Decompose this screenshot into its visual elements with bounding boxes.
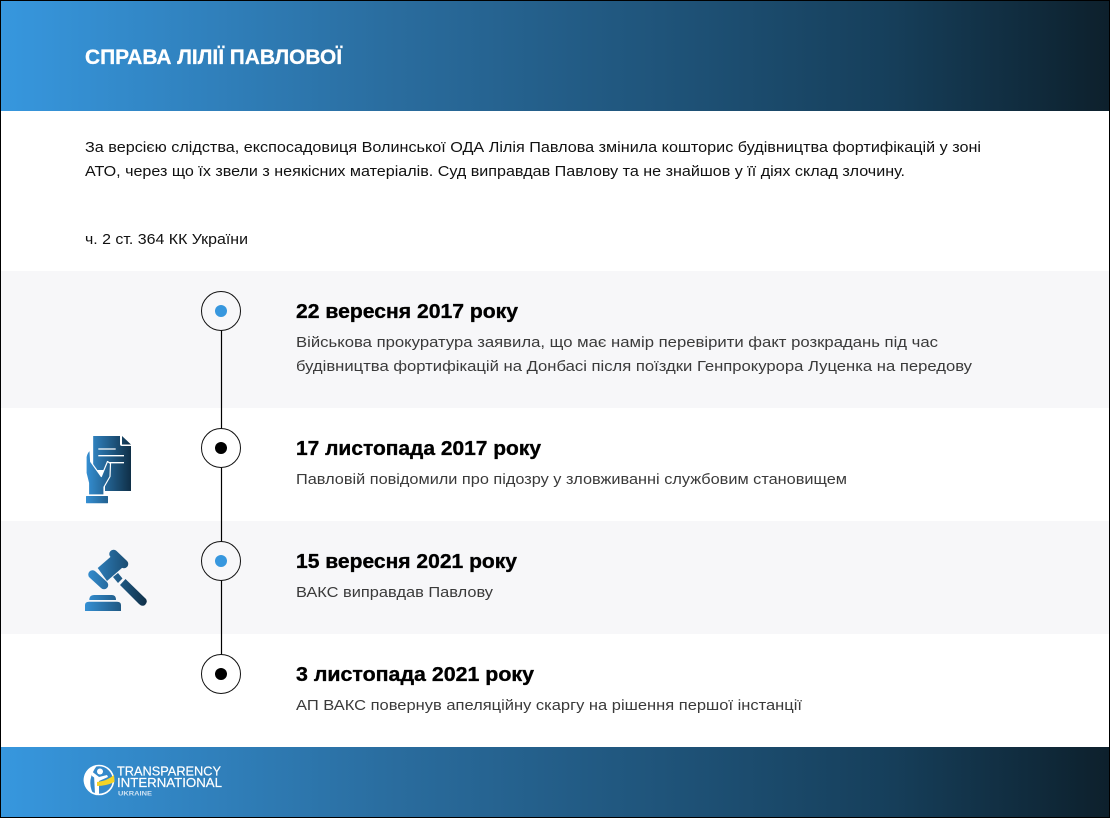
footer band bbox=[1, 747, 1109, 817]
timeline node 2 bbox=[202, 428, 240, 468]
intro text bbox=[85, 139, 981, 180]
logo: Transparency International Ukraine: INTERNATIONAL bbox=[117, 775, 222, 790]
timeline node 1 bbox=[202, 292, 240, 330]
logo emblem bbox=[84, 766, 114, 794]
timeline node 4 bbox=[202, 654, 240, 694]
event 2 bbox=[296, 438, 847, 488]
event 3 bbox=[296, 551, 518, 601]
event 1: 22 вересня 2017 року bbox=[296, 301, 519, 323]
legal article reference: ч. 2 ст. 364 КК України bbox=[85, 231, 248, 248]
intro text: АТО, через що їх звели з неякісних матеріалів. Суд виправдав Павлову та не знайшов у її діях склад злочину. bbox=[85, 163, 905, 180]
timeline line bbox=[220, 311, 222, 674]
logo: Transparency International Ukraine bbox=[84, 764, 222, 798]
title: СПРАВА ЛІЛІЇ ПАВЛОВОЇ bbox=[85, 46, 343, 69]
intro text: За версією слідства, експосадовиця Волинської ОДА Лілія Павлова змінила кошторис будівництва фортифікацій у зоні bbox=[85, 139, 981, 156]
event 1 bbox=[296, 301, 973, 375]
event 4 bbox=[296, 664, 803, 714]
row band: 15 September 2021 bbox=[1, 521, 1109, 634]
row band: 22 September 2017 bbox=[1, 271, 1109, 408]
icon: gavel bbox=[85, 554, 147, 611]
logo: Transparency International Ukraine: TRANSPARENCY bbox=[117, 764, 221, 778]
icon: hand holding document bbox=[86, 436, 131, 503]
timeline node 3 bbox=[202, 542, 240, 580]
event 1: Військова прокуратура заявила, що має намір перевірити факт розкрадань під час bbox=[296, 334, 939, 351]
logo: Transparency International Ukraine: UKRAINE bbox=[118, 790, 153, 798]
event 4: 3 листопада 2021 року bbox=[296, 664, 535, 686]
event 3: 15 вересня 2021 року bbox=[296, 551, 518, 573]
event 2: 17 листопада 2017 року bbox=[296, 438, 542, 460]
event 2: Павловій повідомили про підозру у зловживанні службовим становищем bbox=[296, 471, 847, 488]
header band bbox=[1, 1, 1109, 111]
event 4: АП ВАКС повернув апеляційну скаргу на рішення першої інстанції bbox=[296, 697, 803, 714]
event 3: ВАКС виправдав Павлову bbox=[296, 584, 494, 601]
event 1: будівництва фортифікацій на Донбасі після поїздки Генпрокурора Луценка на передову bbox=[296, 358, 973, 375]
